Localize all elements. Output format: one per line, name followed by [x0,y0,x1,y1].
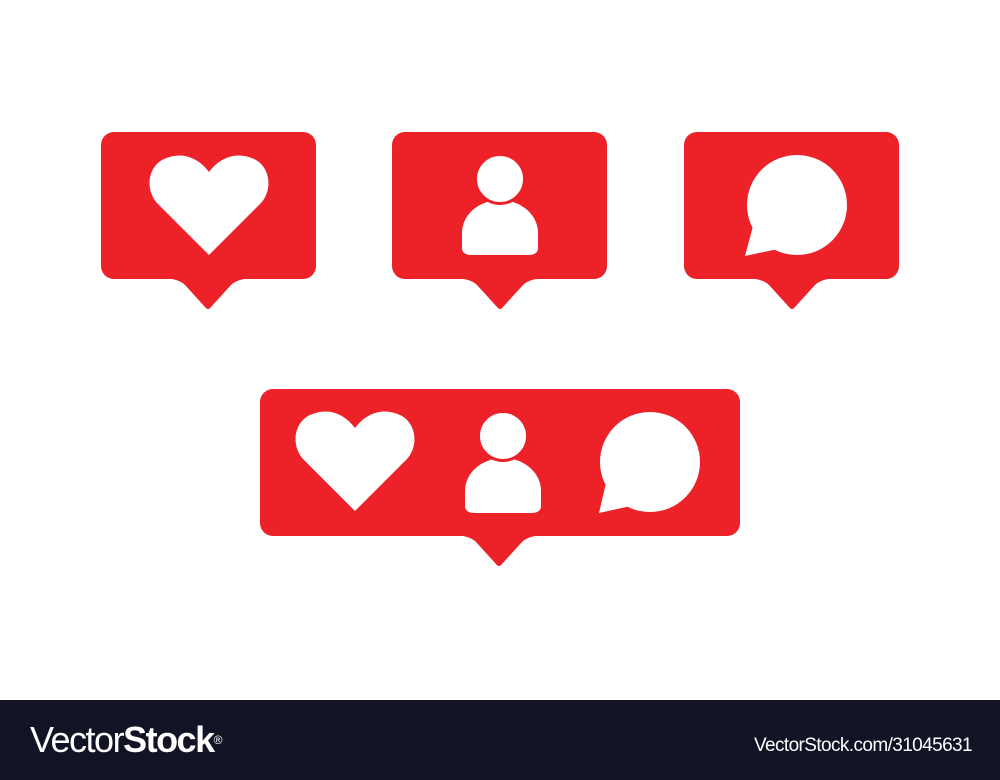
icon: person [465,412,541,513]
icon: speech bubble [599,412,700,513]
icon: person [462,154,538,255]
bubble: heart [101,132,316,309]
bubble: combined [260,389,740,566]
url text: VectorStock.com/31045631 [754,735,972,756]
icon: speech bubble [745,155,847,256]
logo text: VectorStock® [30,719,221,760]
bubble: person [392,132,607,309]
icon: heart [296,411,414,511]
bubble: comment [684,132,899,309]
footer [0,700,1000,780]
icon: heart [150,155,268,255]
